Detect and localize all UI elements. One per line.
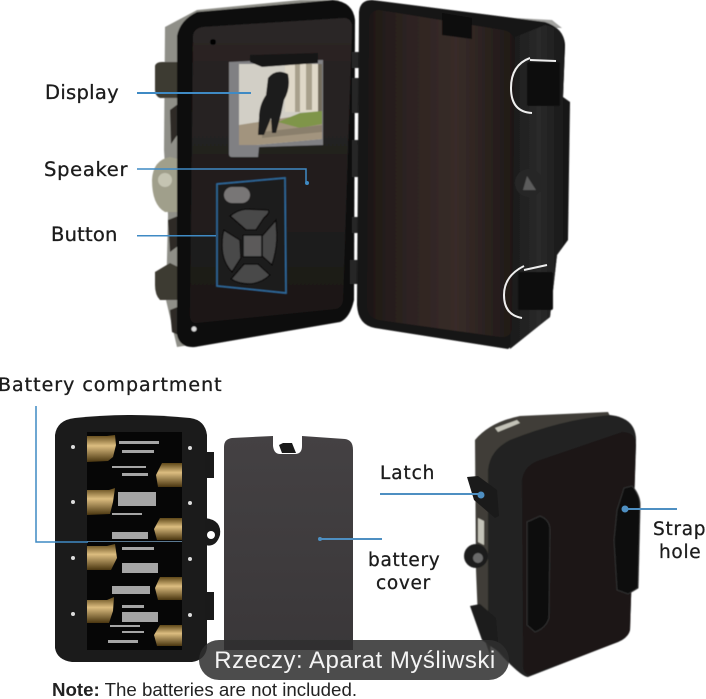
inner panel: [190, 18, 352, 323]
callout: Strap hole: hole: [659, 542, 701, 563]
side screw knob: [464, 544, 488, 568]
tab hole: [207, 531, 215, 539]
directional pad: [222, 209, 277, 284]
screw: [192, 326, 196, 332]
camouflage shell edge: [164, 0, 340, 347]
side lugs: [152, 62, 182, 300]
battery area: [87, 432, 182, 650]
light camo edge: [515, 18, 562, 28]
display frame: [229, 60, 323, 157]
callout: Speaker: [44, 158, 309, 185]
callout: Latch: [380, 463, 484, 498]
side hinge knob: [515, 169, 543, 197]
screen top shadow: [250, 53, 318, 67]
back plate: [522, 432, 636, 675]
display image: boar: [239, 64, 322, 145]
right strap rib: [614, 486, 640, 594]
callout: Strap hole: Strap: [653, 519, 706, 540]
camouflage front rim: [475, 412, 612, 655]
overlay pill: Rzeczy: Aparat Myśliwski: [214, 647, 496, 674]
camera open: rear cover interior: [357, 0, 570, 349]
callout: Button: Button: [51, 223, 118, 246]
housing: [55, 415, 207, 662]
tray interior: [367, 10, 515, 337]
camera open: front housing with display and buttons: [152, 0, 361, 347]
latch notch: [442, 13, 472, 39]
callout: Latch: Latch: [380, 463, 435, 484]
callout: battery cover: cover: [376, 573, 431, 594]
battery labels: [108, 441, 159, 643]
callout: Strap hole: [622, 506, 706, 563]
cover body: [357, 0, 570, 349]
left strap rib: [527, 516, 550, 632]
callout: Battery compartment: [0, 374, 223, 542]
callout: Speaker: Speaker: [44, 158, 128, 181]
callout: Display: Display: [45, 81, 119, 104]
battery ends: [87, 435, 182, 646]
button highlight frame: [217, 178, 286, 293]
callout: battery cover: battery: [368, 550, 440, 571]
callout: battery cover: [318, 537, 440, 594]
camouflage patches: [168, 104, 180, 336]
callout: Battery compartment: Battery compartment: [0, 374, 223, 396]
camera rear view: [464, 412, 640, 677]
menu button: [224, 187, 250, 203]
hinge bits: [350, 52, 361, 284]
bottom latch: [470, 604, 499, 652]
camo highlights: [478, 420, 520, 545]
cover notch clip: [279, 443, 296, 453]
latch tab: [467, 476, 499, 518]
back shell: [488, 415, 636, 677]
black bezel: [177, 0, 355, 347]
side tabs: [205, 452, 220, 620]
battery cover: [224, 436, 353, 650]
side wall: [510, 25, 568, 349]
screws: [71, 445, 192, 617]
lens hole: [210, 39, 216, 45]
overlay pill: [199, 640, 509, 680]
bottom latch clip: [518, 272, 553, 310]
strap rings: [504, 58, 556, 318]
top latch clip: [527, 62, 560, 106]
center divider: [87, 541, 182, 542]
battery compartment: [55, 415, 220, 662]
